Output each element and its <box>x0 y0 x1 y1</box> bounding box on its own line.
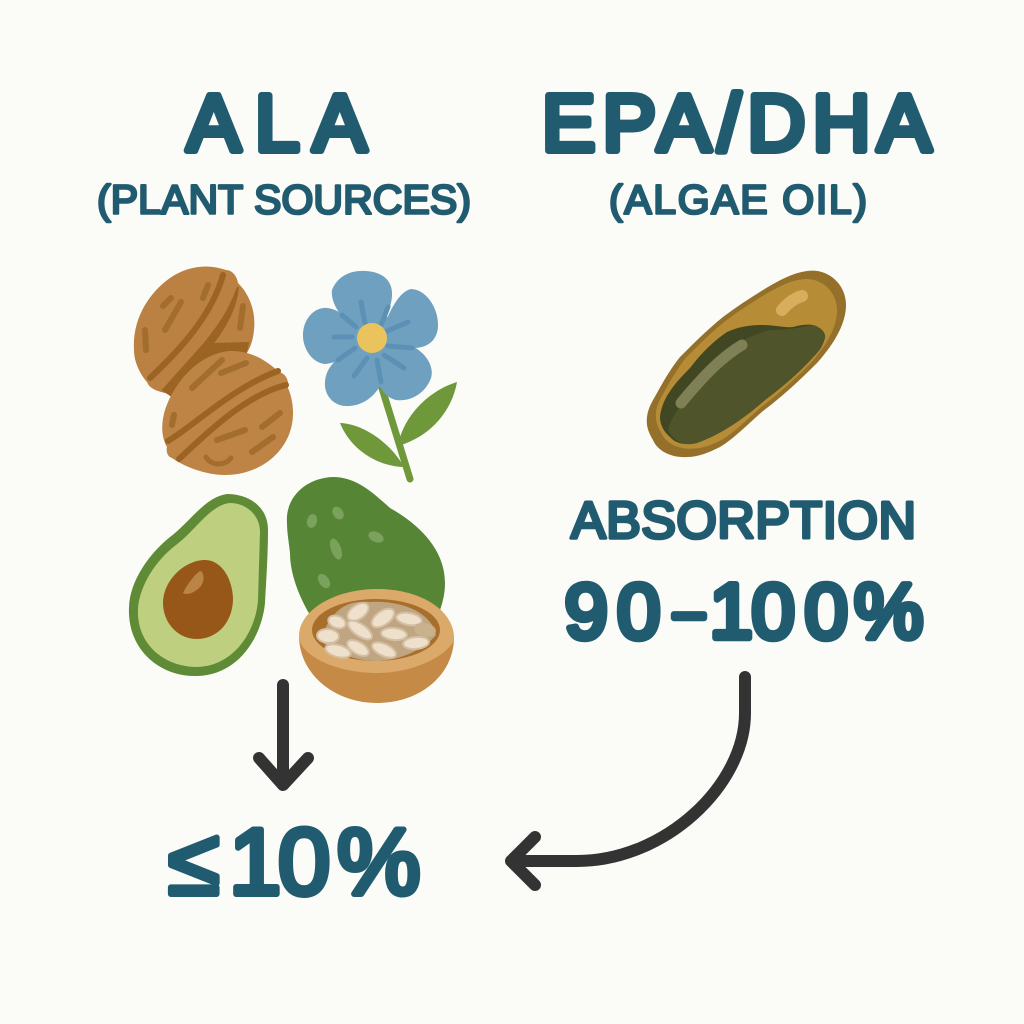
flower centre <box>357 323 387 353</box>
avocado pit <box>163 560 233 639</box>
capsule oil <box>668 325 825 444</box>
label: absorption: ABSORPTION <box>571 492 916 550</box>
walnut: back <box>134 267 254 396</box>
capsule oil shadow <box>660 325 825 444</box>
walnut: front <box>162 351 293 475</box>
icon: avocado half <box>129 494 268 676</box>
subheading: algae oil: (ALGAE OIL) <box>609 176 867 222</box>
bowl body <box>299 637 454 703</box>
capsule inner <box>656 279 837 449</box>
flower petals <box>303 271 438 406</box>
heading: EPA/DHA: EPA/DHA <box>542 78 932 168</box>
capsule oil highlight <box>681 345 742 403</box>
bowl interior <box>312 599 440 661</box>
seeds <box>316 599 437 661</box>
icon: flax flower <box>303 271 457 479</box>
value: 90-100%: 90 <box>564 567 660 655</box>
pit highlight <box>183 571 204 594</box>
value: 90-100%: – <box>674 582 704 642</box>
heading: ALA: ALA <box>187 78 367 168</box>
flower stem <box>381 385 410 479</box>
value: 90-100%: 100% <box>710 567 923 655</box>
arrow: curved from absorption to 10% <box>511 677 745 885</box>
capsule shell highlight <box>782 296 802 310</box>
arrow: down to 10% <box>259 685 308 785</box>
avocado skin <box>129 494 268 676</box>
avocado flesh <box>138 503 260 667</box>
icon: whole avocado <box>287 477 445 615</box>
right leaf <box>398 382 457 446</box>
value: at most 10%: ≤10% <box>168 809 421 914</box>
icon: bowl of seeds <box>299 589 454 703</box>
icon: algae oil capsule <box>647 271 846 457</box>
subheading: plant sources: (PLANT SOURCES) <box>97 176 471 222</box>
left leaf <box>340 423 404 467</box>
capsule shell <box>647 271 846 457</box>
icon: walnuts <box>134 267 293 475</box>
avocado body <box>287 477 445 615</box>
avocado speckles <box>305 504 385 590</box>
bowl rim <box>299 589 454 673</box>
flower veins <box>334 302 412 382</box>
